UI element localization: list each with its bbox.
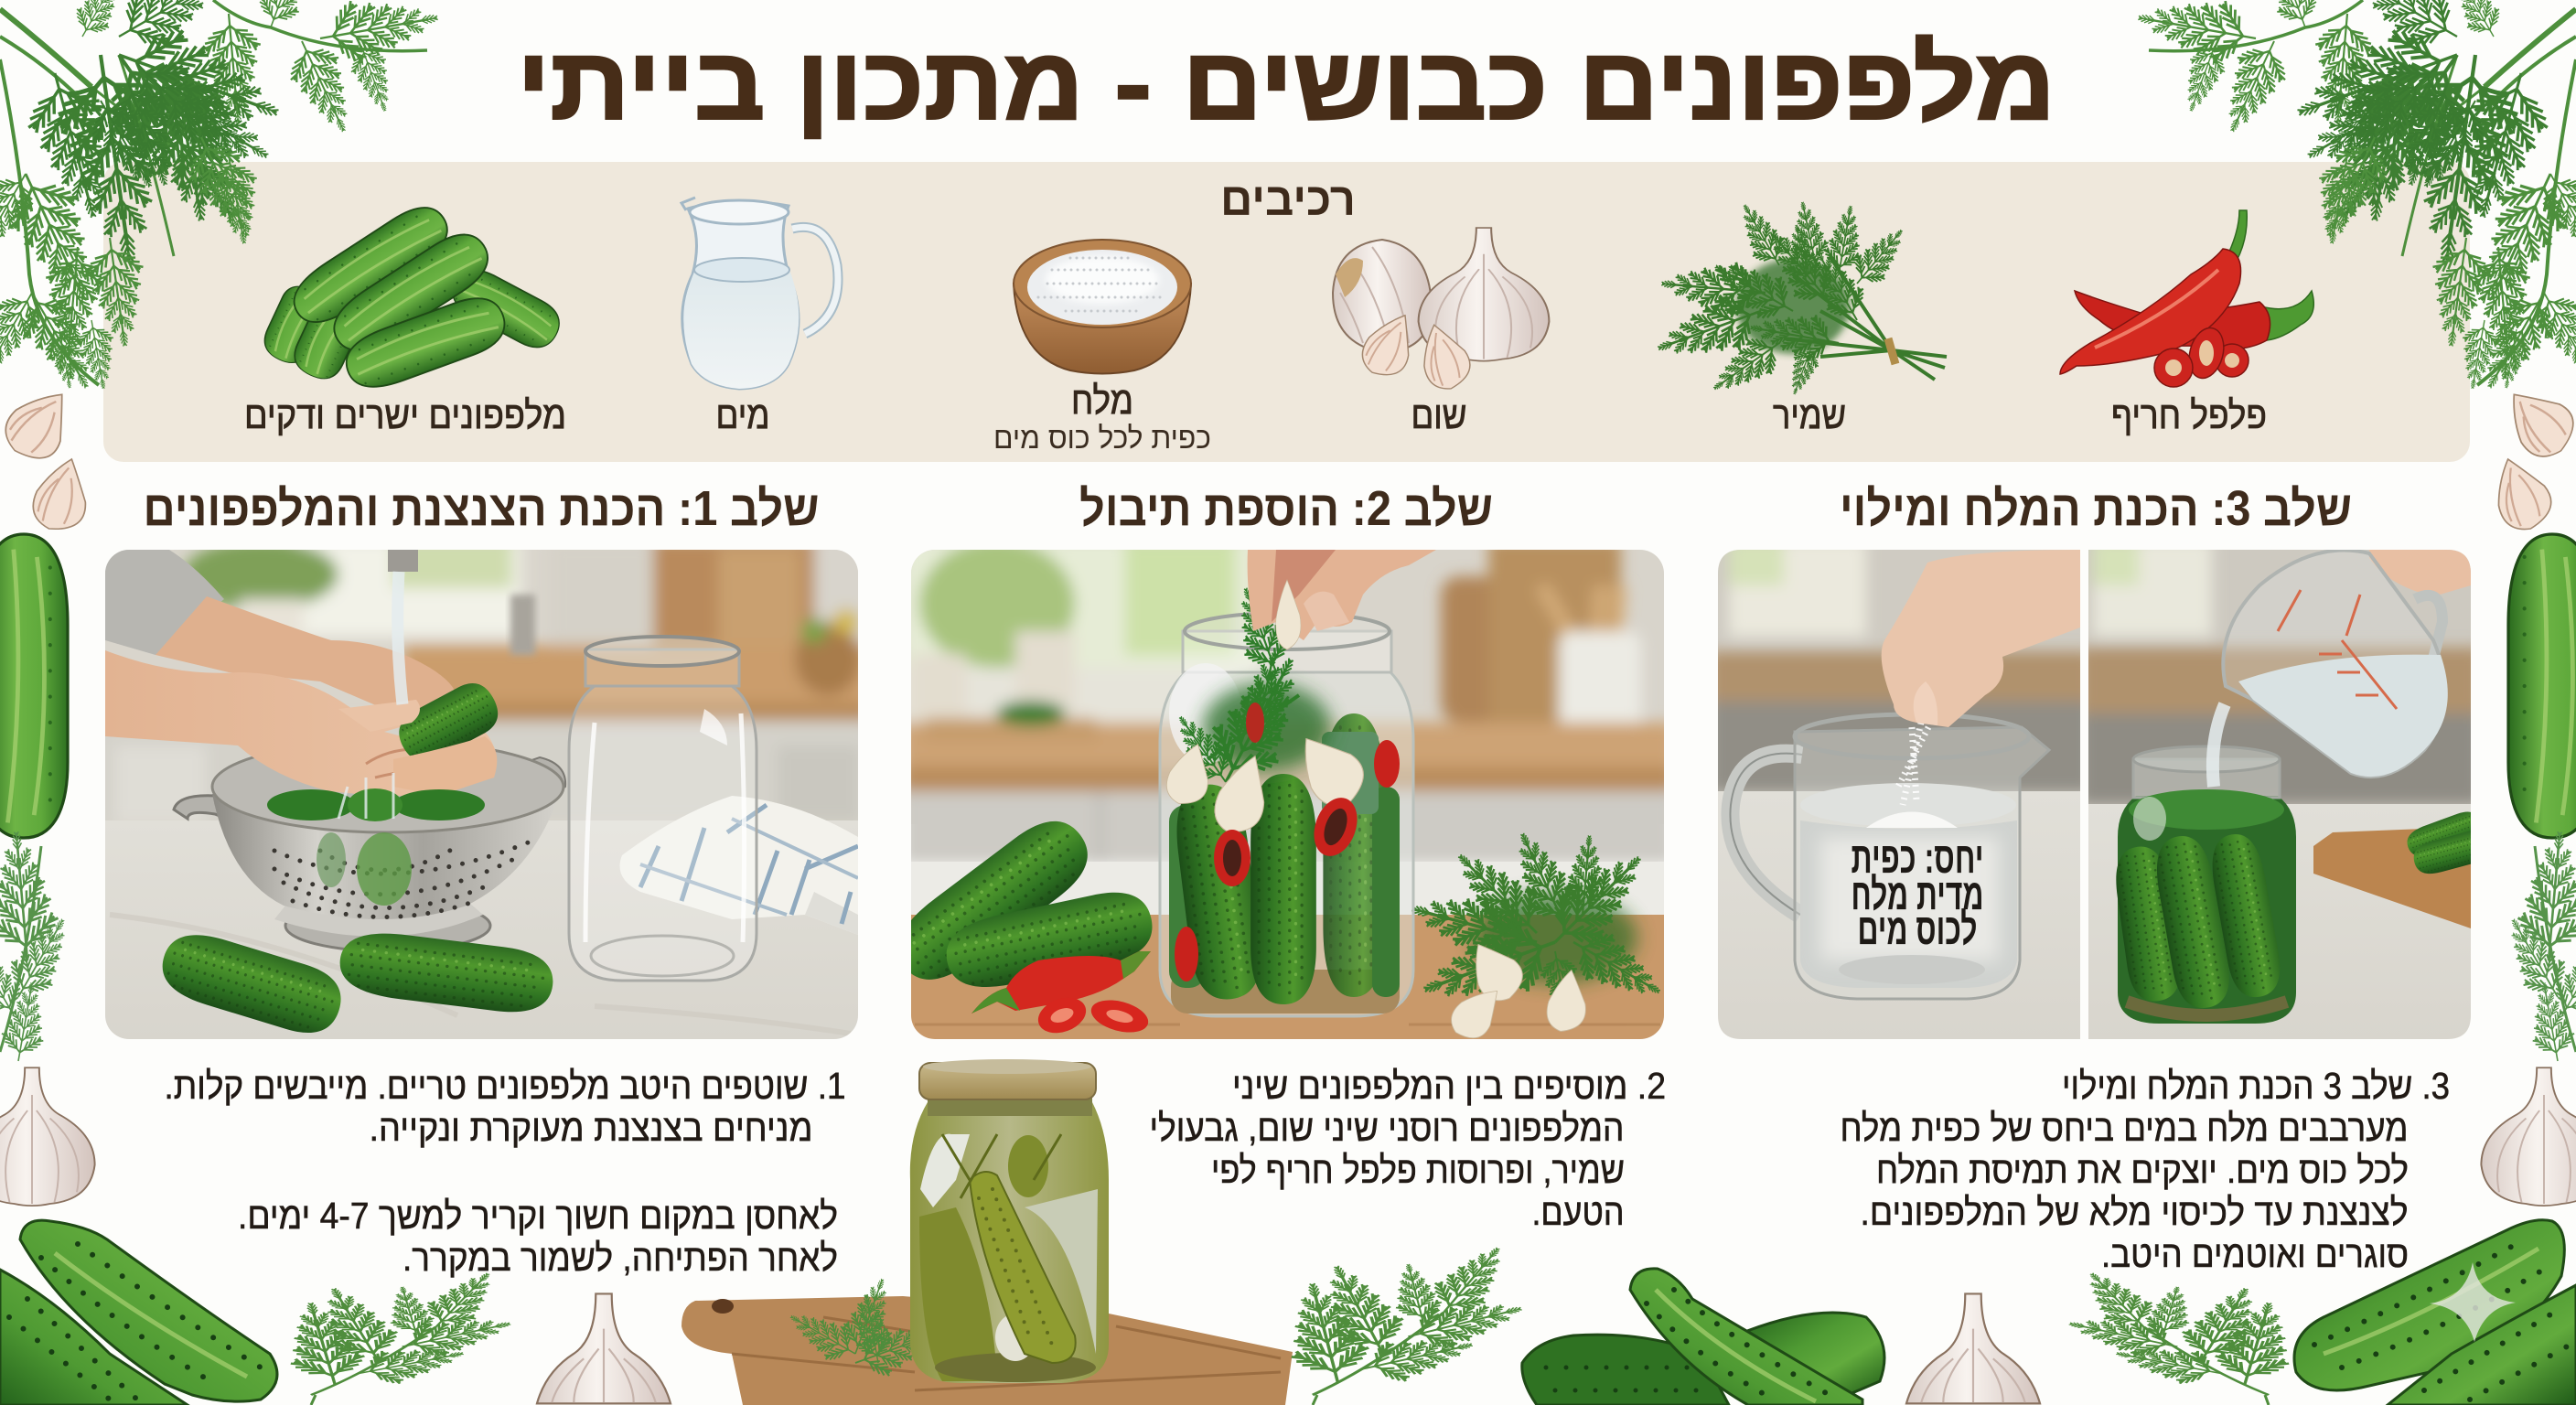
text: step 3 instructions: לכל כוס מים. יוצקים את תמיסת המלח (1876, 1149, 2409, 1191)
decoration: garlic cloves right (2485, 374, 2576, 536)
panel: ingredients (103, 162, 2470, 462)
heading: step 2: שלב 2: הוספת תיבול (1079, 481, 1493, 536)
text: step 3 instructions: מערבבים מלח במים ביחס של כפית מלח (1841, 1107, 2408, 1149)
decoration: left edge cucumber (0, 534, 68, 838)
glass jug (1730, 714, 2049, 999)
jar of pickles (2111, 746, 2296, 1024)
label: water: מים (715, 393, 770, 436)
decoration: bottom cucumbers center (1522, 1269, 1884, 1405)
filled jar (1160, 580, 1413, 1016)
heading: step 3: שלב 3: הכנת המלח ומילוי (1840, 481, 2352, 536)
cucumbers in colander (267, 773, 485, 821)
faucet (510, 595, 535, 655)
photo: step 1 washing cucumbers (96, 540, 869, 1042)
text: step 1 instructions: מניחים בצנצנת מעוקרת ונקייה. (370, 1107, 812, 1149)
icon: garlic (1333, 228, 1549, 394)
label: salt ratio: כפית לכל כוס מים (993, 421, 1211, 455)
jug ratio text: לכוס מים (1857, 906, 1978, 954)
decoration: top left dill (0, 0, 444, 403)
jug ratio text: יחס: כפית (1852, 834, 1983, 883)
decoration: bottom garlic left (537, 1293, 671, 1403)
photo: step 3 left adding salt to jug (1709, 540, 2093, 1040)
text: step 3 instructions: 3. שלב 3 הכנת המלח ומילוי (2062, 1065, 2450, 1107)
blurred kitchen background (96, 540, 869, 823)
cucumbers on counter (163, 933, 553, 1033)
cutting board (2313, 827, 2471, 928)
wooden board (911, 915, 1664, 1040)
decoration: right edge garlic (2481, 1067, 2576, 1206)
pepper slices in jar (1175, 702, 1400, 981)
decoration: bottom right cucumbers (2294, 1220, 2576, 1405)
countertop (105, 820, 858, 1040)
text: step 2 instructions: הטעם. (1531, 1191, 1625, 1233)
hand with salt (1882, 550, 2080, 727)
jug ratio text: מדית מלח (1852, 871, 1983, 919)
pickle jar (910, 1059, 1109, 1383)
colander (174, 741, 565, 951)
arms and hands (105, 550, 496, 796)
wooden board with pickle jar (682, 1059, 1293, 1405)
label: dill: שמיר (1773, 393, 1846, 436)
label: chili: פלפל חריף (2111, 393, 2267, 436)
icon: chili peppers (2060, 210, 2313, 387)
decoration: right edge cucumber (2508, 534, 2576, 838)
empty glass jar (569, 637, 757, 981)
icon: salt bowl (1014, 240, 1191, 373)
text: step 1 instructions: לאחר הפתיחה, לשמור במקרר. (402, 1237, 838, 1279)
text: step 2 instructions: המלפפונים רוסני שיני שום, גבעולי (1149, 1107, 1625, 1149)
blurred kitchen background (902, 540, 1675, 864)
heading: step 1: שלב 1: הכנת הצנצנת והמלפפונים (143, 481, 820, 536)
decoration: bottom left dill (271, 1265, 521, 1405)
dill in jar (1162, 580, 1331, 800)
title: מלפפונים כבושים - מתכון בייתי (517, 27, 2055, 141)
photo: step 3 right pouring brine (2079, 540, 2493, 1040)
decoration: bottom dill right (2058, 1265, 2309, 1405)
icon: cucumbers (258, 196, 567, 397)
text: step 1 instructions (165, 1065, 846, 1279)
label: cucumbers: מלפפונים ישרים ודקים (244, 393, 566, 436)
icon: water pitcher (682, 198, 838, 389)
dill on board (780, 1271, 948, 1387)
decoration: bottom garlic right (1906, 1293, 2040, 1403)
measuring cup (2223, 551, 2448, 777)
text: step 3 instructions: לצנצנת עד לכיסוי מלא של המלפפונים. (1861, 1191, 2408, 1233)
icon: dill bunch (1648, 195, 1947, 407)
decoration: bottom left cucumbers (0, 1220, 277, 1405)
text: step 2 instructions (1149, 1065, 1666, 1233)
text: step 2 instructions: 2. מוסיפים בין המלפפונים שיני (1232, 1065, 1666, 1107)
cucumber in hand (399, 683, 498, 756)
thumb (350, 701, 420, 725)
text: step 3 instructions (1841, 1065, 2450, 1275)
text: step 1 instructions: 1. שוטפים היטב מלפפונים טריים. מייבשים קלות. (165, 1065, 845, 1107)
dill on counter (1411, 832, 1660, 997)
counter (1718, 791, 2084, 1040)
decoration: bottom dill center (1271, 1238, 1533, 1405)
red pepper (971, 951, 1152, 1039)
heading: ingredients: רכיבים (1220, 174, 1356, 225)
water stream (2213, 704, 2225, 787)
label: garlic: שום (1411, 393, 1467, 436)
decoration: top right dill (2132, 0, 2576, 403)
cucumbers left (911, 821, 1153, 987)
garlic cloves on board (1451, 944, 1586, 1039)
white counter (911, 862, 1664, 917)
photo: step 2 filling jar (883, 540, 1675, 1047)
water stream (398, 572, 402, 704)
finger detail (1914, 681, 1937, 725)
towel (620, 796, 858, 935)
counter (2088, 804, 2473, 1040)
hand adding garlic (1248, 550, 1436, 649)
text: step 1 instructions: לאחסן במקום חשוך וקריר למשך 4-7 ימים. (238, 1195, 838, 1237)
decoration: garlic cloves left (0, 378, 99, 538)
text: step 3 instructions: סוגרים ואוטמים היטב. (2101, 1233, 2409, 1275)
fingers under cucumber (393, 736, 497, 796)
decoration: left edge garlic (0, 1067, 95, 1206)
jug ratio text (1852, 834, 1983, 954)
decoration: left edge dill (0, 829, 85, 1065)
cucumbers on board (2403, 808, 2493, 878)
hand holding cup (2369, 550, 2471, 596)
garlic cloves in jar (1161, 722, 1375, 841)
salt stream (1898, 723, 1928, 805)
decoration: right edge dill (2491, 829, 2576, 1065)
text: step 2 instructions: שמיר, ופרוסות פלפל חריף לפי (1211, 1149, 1625, 1191)
label: salt: מלח (1071, 379, 1133, 422)
cucumbers in jar (1169, 713, 1400, 1004)
